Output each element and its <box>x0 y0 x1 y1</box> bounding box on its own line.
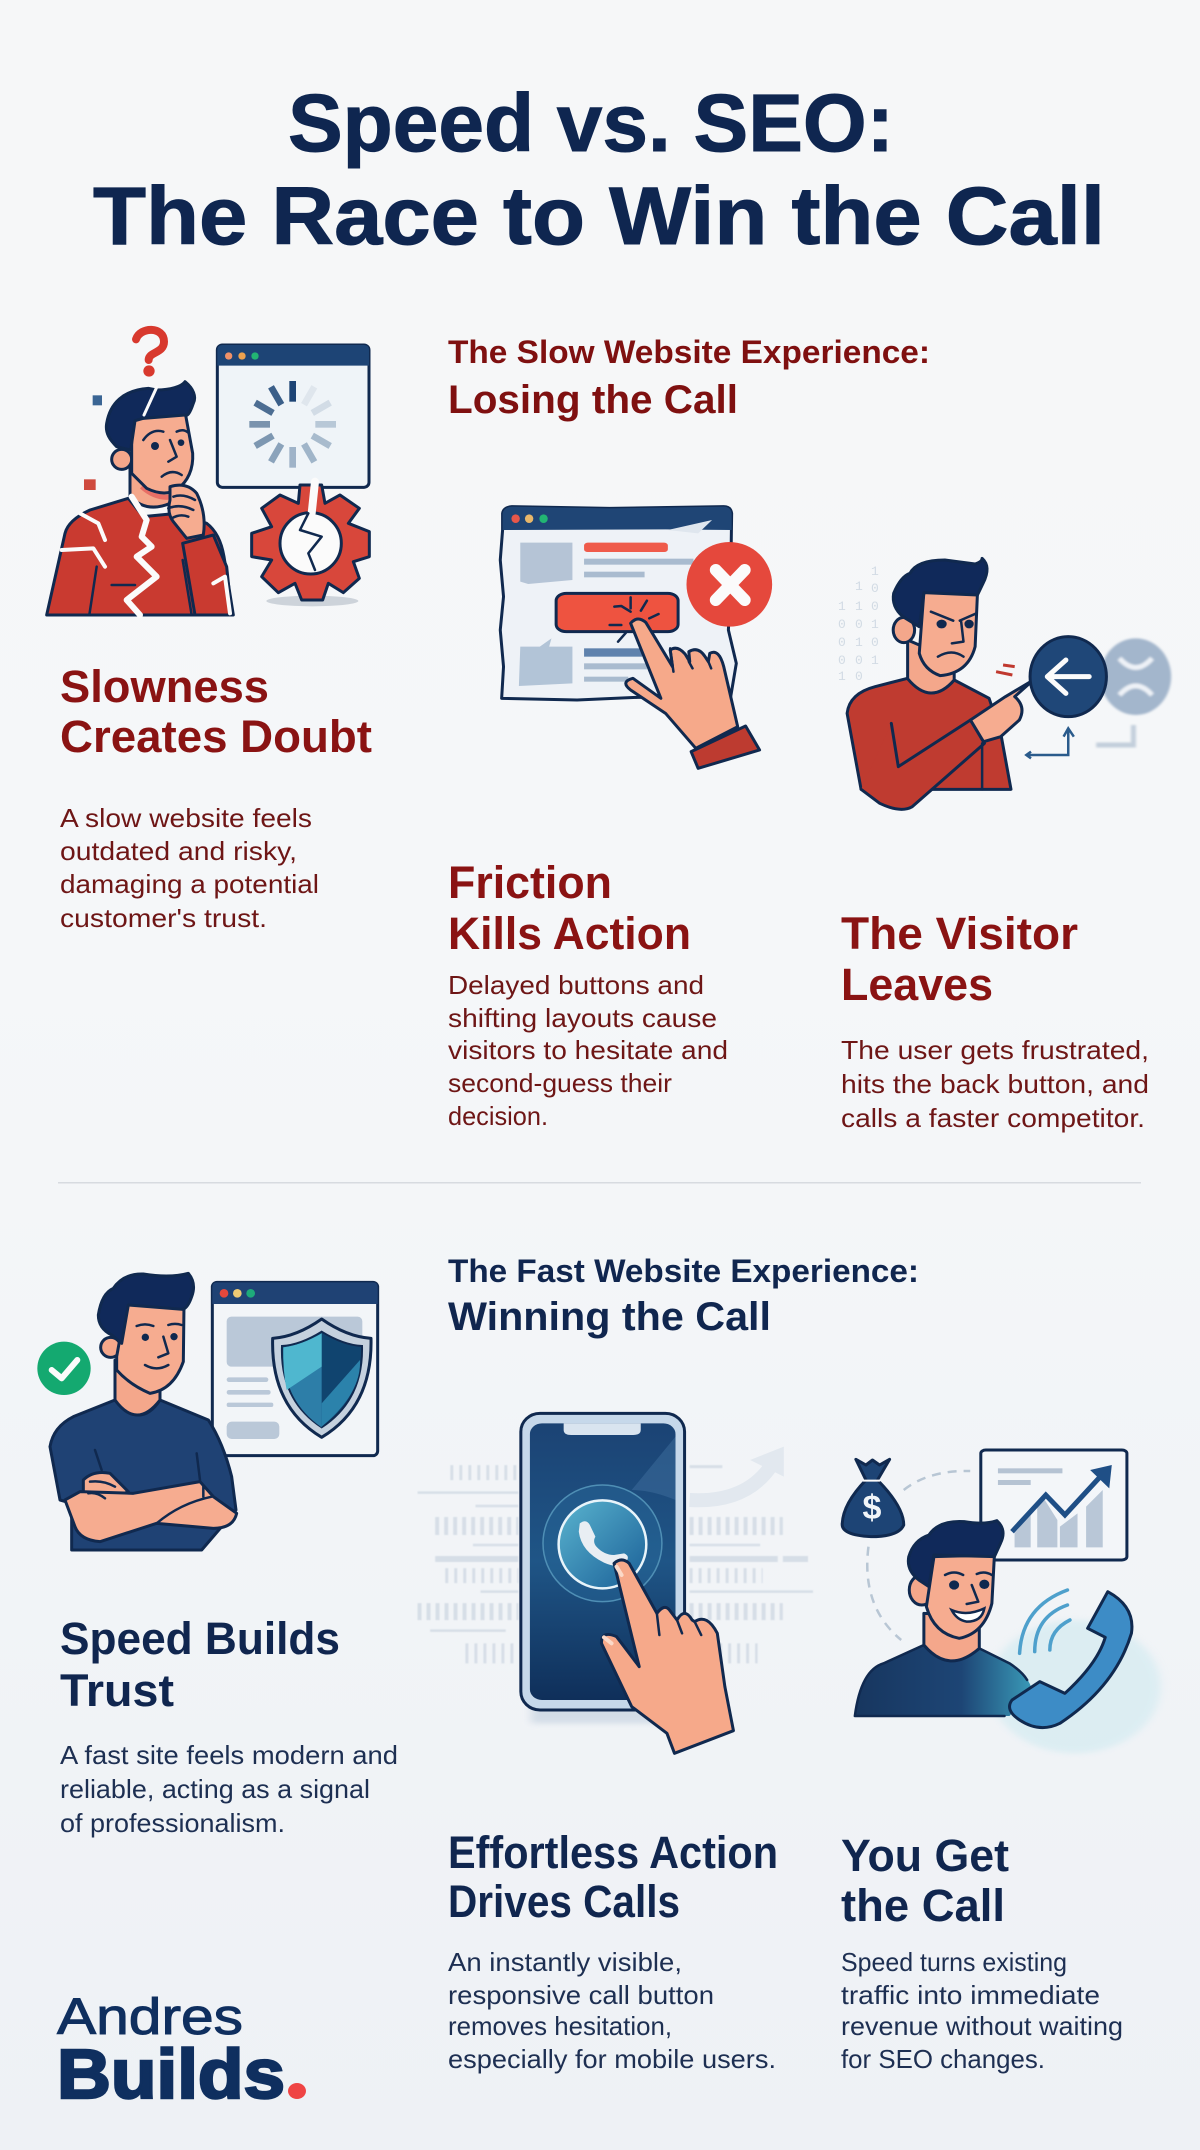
text block: The Visitor Leaves: calls a faster competitor. <box>841 1103 1145 1133</box>
text block: You Get the Call: Speed turns existing <box>841 1947 1067 1977</box>
decoration: faded binary digits: 1 <box>838 599 846 614</box>
logo: Andres Builds <box>57 1988 306 2113</box>
text block: Friction Kills Action: Delayed buttons and <box>448 970 704 1000</box>
illustration: confused man, loading browser and broken gear <box>47 330 369 615</box>
text block: Friction Kills Action: decision. <box>448 1101 548 1131</box>
decoration: faded binary digits: 0 <box>871 599 879 614</box>
section heading: slow <box>448 334 930 422</box>
section heading: slow: The Slow Website Experience: <box>448 334 930 370</box>
text block: Speed Builds Trust: Trust <box>60 1665 174 1716</box>
logo: Andres Builds: Builds <box>57 2035 285 2113</box>
text block: Friction Kills Action <box>448 857 728 1131</box>
text block: Slowness Creates Doubt <box>60 661 372 933</box>
text block: The Visitor Leaves: Leaves <box>841 959 993 1010</box>
text block: Effortless Action Drives Calls: especially for mobile users. <box>448 2044 776 2074</box>
illustration: happy man on phone with revenue chart <box>842 1450 1161 1753</box>
title: The Race to Win the Call <box>93 171 1105 262</box>
text block: Friction Kills Action: shifting layouts cause <box>448 1003 717 1033</box>
illustration: frustrated man pressing back button <box>847 558 1171 809</box>
text block: Effortless Action Drives Calls: responsive call button <box>448 1980 714 2010</box>
panel: fast website experience <box>37 1253 1161 2074</box>
text block: Speed Builds Trust: Speed Builds <box>60 1613 340 1664</box>
section heading: fast: Winning the Call <box>448 1295 771 1339</box>
text block: Slowness Creates Doubt: Slowness <box>60 661 269 712</box>
decoration: faded binary digits: 0 <box>871 635 879 650</box>
text block: You Get the Call: for SEO changes. <box>841 2044 1045 2074</box>
illustration: phone with call button being tapped <box>418 1413 813 1753</box>
decoration: faded binary digits: 0 <box>871 581 879 596</box>
text block: Friction Kills Action: Friction <box>448 857 612 908</box>
text block: Slowness Creates Doubt: Creates Doubt <box>60 711 372 762</box>
text block: Slowness Creates Doubt: customer's trust. <box>60 903 267 933</box>
text block: Speed Builds Trust <box>60 1613 398 1838</box>
decoration: faded binary digits: 1 <box>855 635 863 650</box>
text block: Slowness Creates Doubt: damaging a potential <box>60 869 319 899</box>
title: Speed vs. SEO: <box>288 78 894 169</box>
text block: The Visitor Leaves <box>841 908 1149 1133</box>
illustration: crumpled browser with failed click <box>500 507 772 768</box>
text block: Friction Kills Action: second-guess their <box>448 1068 672 1098</box>
text block: You Get the Call: the Call <box>841 1880 1005 1931</box>
text block: Slowness Creates Doubt: outdated and risky, <box>60 836 297 866</box>
section heading: fast: The Fast Website Experience: <box>448 1253 919 1289</box>
decoration: faded binary digits: 0 <box>855 617 863 632</box>
text block: Speed Builds Trust: A fast site feels modern and <box>60 1740 398 1770</box>
text block: Effortless Action Drives Calls: Effortless Action <box>448 1827 778 1878</box>
icon: dollar sign on money bag: $ <box>863 1489 882 1527</box>
decoration: faded binary digits: 0 <box>838 653 846 668</box>
text block: Effortless Action Drives Calls <box>448 1827 778 2074</box>
text block: You Get the Call: traffic into immediate <box>841 1980 1100 2010</box>
text block: The Visitor Leaves: The Visitor <box>841 908 1078 959</box>
section heading: slow: Losing the Call <box>448 378 738 422</box>
text block: Friction Kills Action: Kills Action <box>448 908 691 959</box>
text block: You Get the Call <box>841 1830 1123 2074</box>
decoration: faded binary digits: 1 <box>871 653 879 668</box>
text block: You Get the Call: revenue without waiting <box>841 2011 1123 2041</box>
decoration: faded binary digits: 1 <box>871 564 879 579</box>
decoration: faded binary digits: 1 <box>855 599 863 614</box>
decoration: faded binary digits <box>838 564 879 684</box>
text block: The Visitor Leaves: The user gets frustrated, <box>841 1035 1149 1065</box>
text block: Slowness Creates Doubt: A slow website feels <box>60 803 312 833</box>
decoration: faded binary digits: 0 <box>838 617 846 632</box>
section heading: fast <box>448 1253 919 1339</box>
title <box>93 78 1105 262</box>
text block: Friction Kills Action: visitors to hesitate and <box>448 1035 728 1065</box>
decoration: faded binary digits: 0 <box>855 669 863 684</box>
logo: Andres Builds: Andres <box>57 1988 243 2045</box>
illustration: confident man with secure browser <box>37 1273 378 1550</box>
text block: Speed Builds Trust: of professionalism. <box>60 1808 285 1838</box>
decoration: faded binary digits: 0 <box>855 653 863 668</box>
decoration: faded binary digits: 1 <box>838 669 846 684</box>
decoration: faded binary digits: 1 <box>855 579 863 594</box>
decoration: faded binary digits: 0 <box>838 635 846 650</box>
text block: Effortless Action Drives Calls: Drives Calls <box>448 1876 680 1927</box>
panel: slow website experience <box>47 330 1171 1133</box>
text block: Speed Builds Trust: reliable, acting as a signal <box>60 1774 370 1804</box>
decoration: faded binary digits: 1 <box>871 617 879 632</box>
text block: You Get the Call: You Get <box>841 1830 1009 1881</box>
text block: Effortless Action Drives Calls: removes hesitation, <box>448 2011 672 2041</box>
text block: Effortless Action Drives Calls: An instantly visible, <box>448 1947 682 1977</box>
text block: The Visitor Leaves: hits the back button, and <box>841 1069 1149 1099</box>
